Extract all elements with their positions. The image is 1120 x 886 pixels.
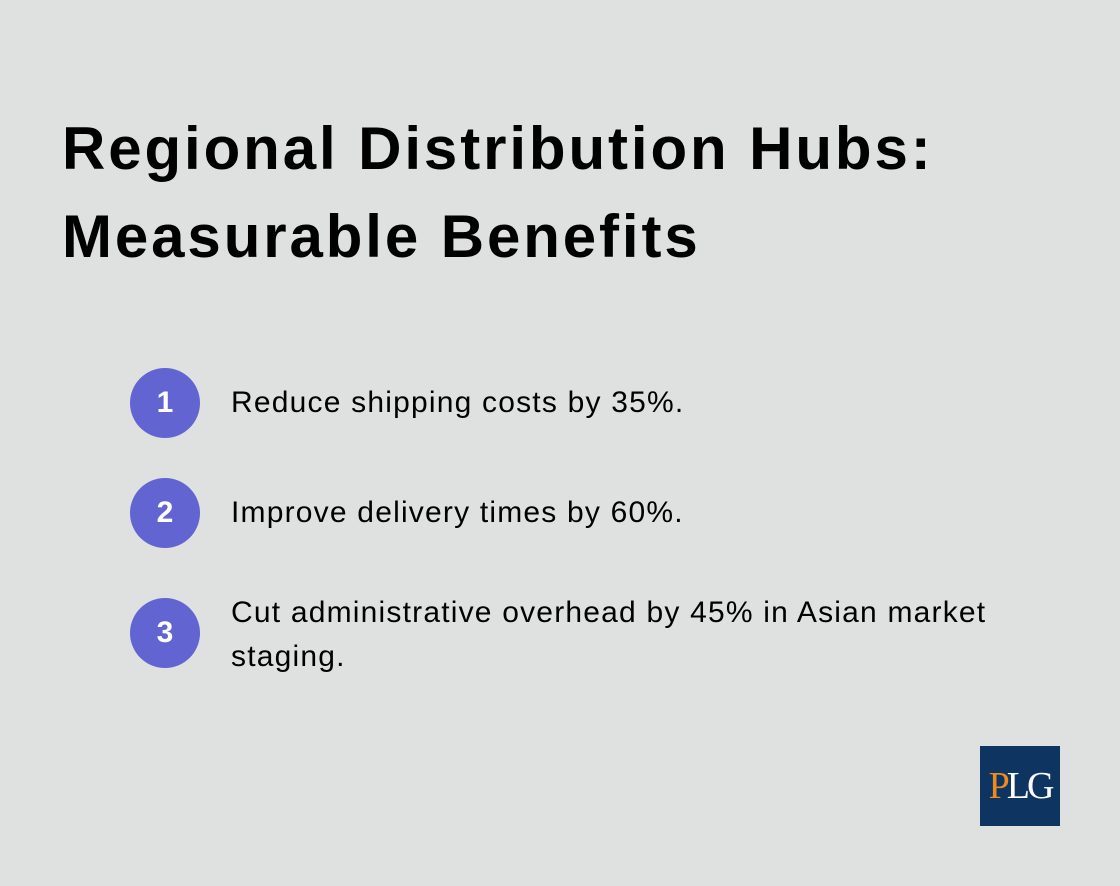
number badge 1: 1 bbox=[157, 386, 173, 419]
number badge 3 bbox=[130, 598, 200, 668]
title: Regional Distribution Hubs: bbox=[62, 115, 934, 182]
text 3: Cut administrative overhead by 45% in Asian market staging. bbox=[231, 596, 986, 673]
number badge 2: 2 bbox=[157, 496, 173, 529]
title: Measurable Benefits bbox=[62, 203, 701, 270]
number badge 1 bbox=[130, 368, 200, 438]
item 2 bbox=[130, 478, 684, 548]
text 2: Improve delivery times by 60%. bbox=[231, 496, 684, 529]
number badge 2 bbox=[130, 478, 200, 548]
text 1: Reduce shipping costs by 35%. bbox=[231, 386, 684, 419]
logo: PLG: PLG bbox=[989, 765, 1051, 807]
title bbox=[62, 115, 934, 270]
item 1 bbox=[130, 368, 684, 438]
logo: PLG bbox=[980, 746, 1060, 826]
number badge 3: 3 bbox=[157, 616, 173, 649]
item 3 bbox=[130, 596, 986, 673]
